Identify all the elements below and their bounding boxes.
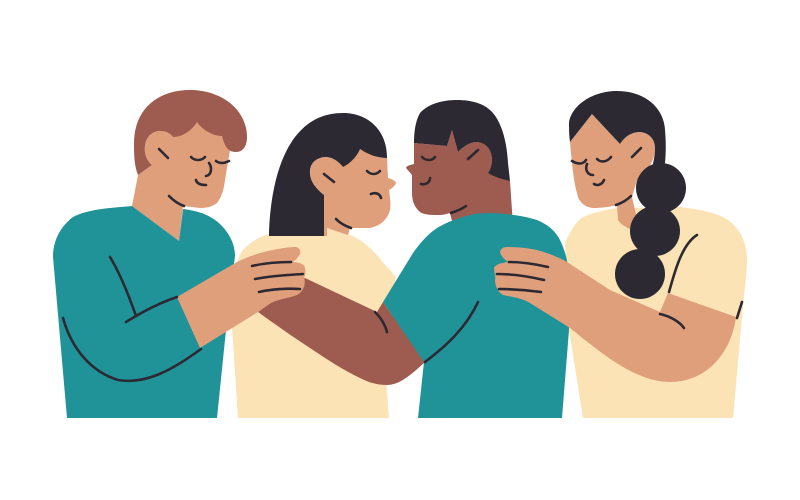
fingers [497,262,548,292]
clothing creases [63,257,201,381]
neck and face [406,130,513,225]
hair [134,90,247,175]
person: second from left, brown arm [258,278,425,385]
hair [414,100,510,181]
hair [269,113,387,236]
facial features [159,149,229,206]
hair [569,91,666,175]
facial features [324,171,381,228]
facial features [421,150,478,213]
person: second from left, woman in cream shirt [232,113,396,418]
neck and face [310,149,396,236]
shirt: teal [383,213,569,418]
arm and hand [494,247,736,382]
person: right, woman in cream shirt [565,91,747,418]
neck and face [570,114,655,232]
arm and hand [177,247,305,348]
neck and face [132,118,230,241]
fingers [252,262,303,292]
sleeve crease [669,235,697,292]
shirt: cream [232,228,396,418]
braid [615,163,686,299]
shirt: cream [565,207,747,418]
clothing and arm creases [375,302,742,362]
shirt: teal [53,206,235,418]
facial features [572,148,641,205]
person: third from left, teal back [375,100,742,418]
person: left, man in teal shirt [53,90,305,418]
